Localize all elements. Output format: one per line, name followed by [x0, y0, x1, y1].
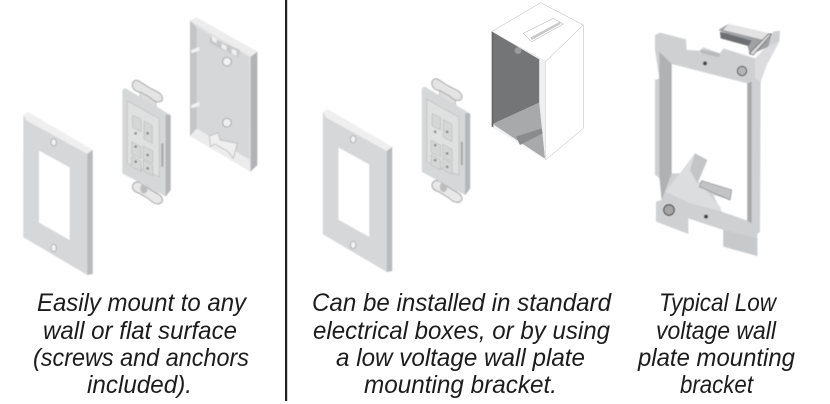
panel: surface mount — [23, 17, 257, 399]
panel: electrical box install — [312, 3, 795, 399]
icon: wall plate cover — [323, 109, 392, 272]
caption: surface mount — [33, 289, 249, 399]
caption: electrical box install: Can be installed in standard — [312, 289, 612, 317]
icon: keypad device — [122, 80, 171, 204]
caption: surface mount: included). — [87, 371, 192, 399]
icon: wall plate cover — [23, 112, 93, 275]
icon: electrical box — [492, 3, 583, 160]
icon: keypad device — [422, 79, 470, 202]
caption: electrical box install — [312, 289, 612, 399]
icon: low voltage mounting bracket — [655, 24, 780, 256]
caption: mounting bracket: voltage wall — [656, 317, 777, 345]
caption: surface mount: Easily mount to any — [37, 289, 247, 317]
caption: electrical box install: a low voltage wall plate — [336, 344, 585, 372]
divider between panels — [285, 0, 287, 401]
caption: mounting bracket: plate mounting — [637, 344, 795, 372]
caption: mounting bracket: Typical Low — [659, 289, 778, 317]
caption: electrical box install: mounting bracket. — [364, 371, 557, 399]
icon: surface mount back plate — [190, 17, 257, 172]
caption: surface mount: (screws and anchors — [33, 344, 249, 372]
caption: mounting bracket: bracket — [680, 371, 754, 399]
caption: surface mount: wall or flat surface — [43, 317, 237, 345]
caption: electrical box install: electrical boxes, or by using — [313, 317, 610, 345]
caption: mounting bracket — [637, 289, 795, 399]
